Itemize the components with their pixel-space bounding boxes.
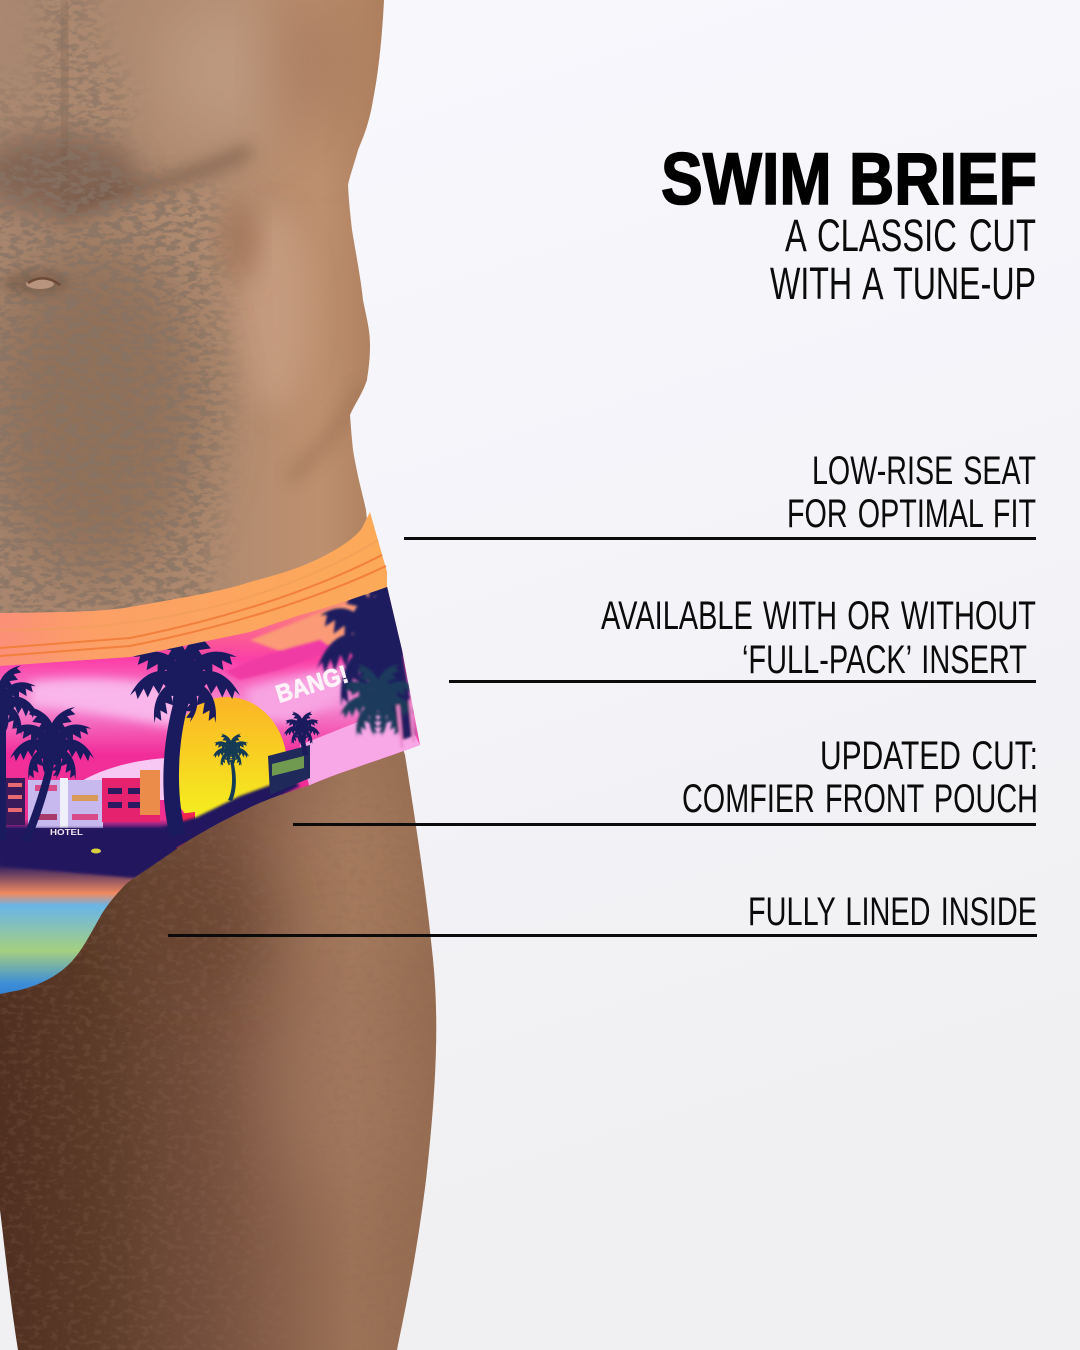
waistband <box>0 512 387 666</box>
hotel sign: HOTEL <box>50 828 83 837</box>
callout: fully lined inside <box>168 890 1037 937</box>
callout: low-rise seat <box>404 449 1036 540</box>
navel <box>1 271 69 295</box>
right dark palm mass <box>316 586 418 748</box>
navy shoreline <box>0 778 300 878</box>
photo: torso and thigh wearing the swim brief <box>0 0 450 1350</box>
brand mark: BANG! <box>273 660 352 709</box>
sun <box>178 697 286 830</box>
rib shadow <box>60 150 250 215</box>
torso <box>0 0 384 613</box>
subtitle <box>770 210 1036 309</box>
buildings <box>6 770 195 828</box>
body hair texture <box>0 0 234 613</box>
callout: updated cut <box>293 734 1038 826</box>
palm trees <box>0 641 320 840</box>
swim brief <box>0 512 430 1000</box>
callout: full-pack insert <box>449 594 1036 683</box>
lifeguard hut <box>268 745 310 795</box>
thigh <box>0 740 450 1350</box>
printed fabric <box>0 586 420 994</box>
